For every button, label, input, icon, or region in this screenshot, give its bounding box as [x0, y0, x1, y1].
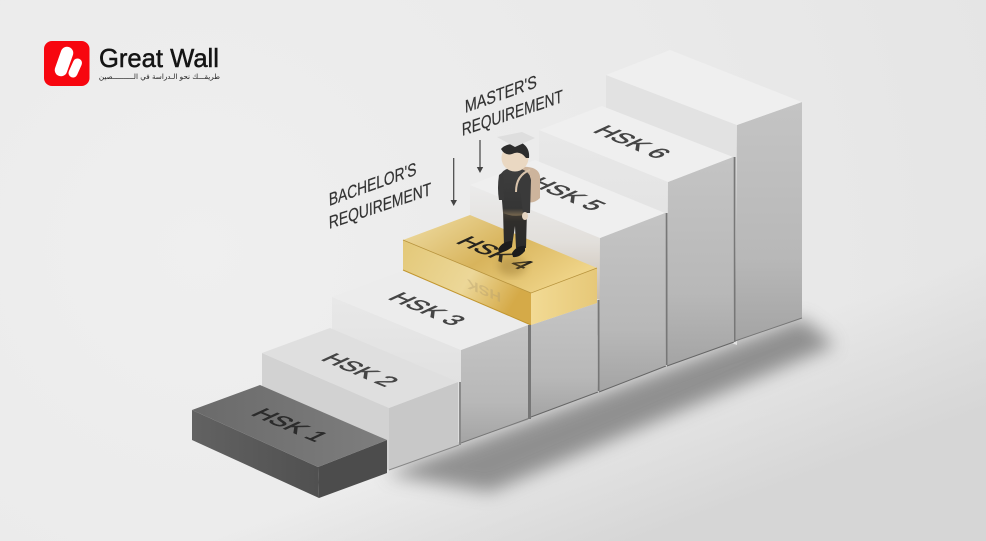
- staircase: [192, 50, 802, 498]
- arrow: bachelor's: [450, 158, 457, 206]
- logo wordmark: Great Wall: [99, 45, 219, 73]
- step: HSK 1 dark: [192, 385, 387, 498]
- icon: mortarboard: [497, 132, 535, 147]
- figure right arm: [518, 174, 531, 213]
- label: bachelor's requirement: REQUIREMENT: [329, 179, 431, 233]
- figure torso: [500, 168, 530, 216]
- figure reflection: [498, 256, 526, 276]
- reflection of HSK 4 label: HSK: [466, 275, 501, 304]
- figure head: [502, 144, 528, 172]
- label: HSK 1: HSK 1: [245, 406, 334, 445]
- step: HSK 3: [332, 272, 530, 443]
- label: HSK 6: HSK 6: [587, 123, 676, 162]
- figure: graduate student: [497, 132, 540, 276]
- arrow: master's: [477, 140, 483, 173]
- figure hand: [522, 212, 528, 220]
- label: HSK 3: HSK 3: [382, 290, 471, 329]
- figure strap: [516, 170, 530, 192]
- logo Arabic tagline: طريقـــك نحو الـدراسة في الــــــــــصين: [99, 72, 220, 81]
- step: HSK 5: [470, 160, 666, 392]
- step: HSK 2: [262, 328, 460, 470]
- step: top unlabeled block: [606, 50, 802, 345]
- figure legs: [503, 210, 527, 248]
- step: HSK 6: [539, 106, 734, 366]
- icon: red logo square: [44, 41, 90, 86]
- figure hair: [501, 143, 529, 158]
- label: master's requirement: REQUIREMENT: [462, 87, 563, 140]
- label: HSK 2: HSK 2: [315, 351, 404, 390]
- figure shoes: [498, 241, 525, 257]
- label: bachelor's requirement: BACHELOR'S: [329, 159, 417, 210]
- label: HSK 5: HSK 5: [522, 175, 611, 214]
- icon: backpack: [518, 167, 540, 202]
- logo: [44, 41, 220, 86]
- figure left arm: [498, 172, 504, 200]
- label: master's requirement: MASTER'S: [465, 71, 537, 117]
- step: HSK 4 gold: [403, 215, 597, 325]
- block under HSK 4: [531, 300, 598, 417]
- label: HSK 4: HSK 4: [450, 234, 539, 273]
